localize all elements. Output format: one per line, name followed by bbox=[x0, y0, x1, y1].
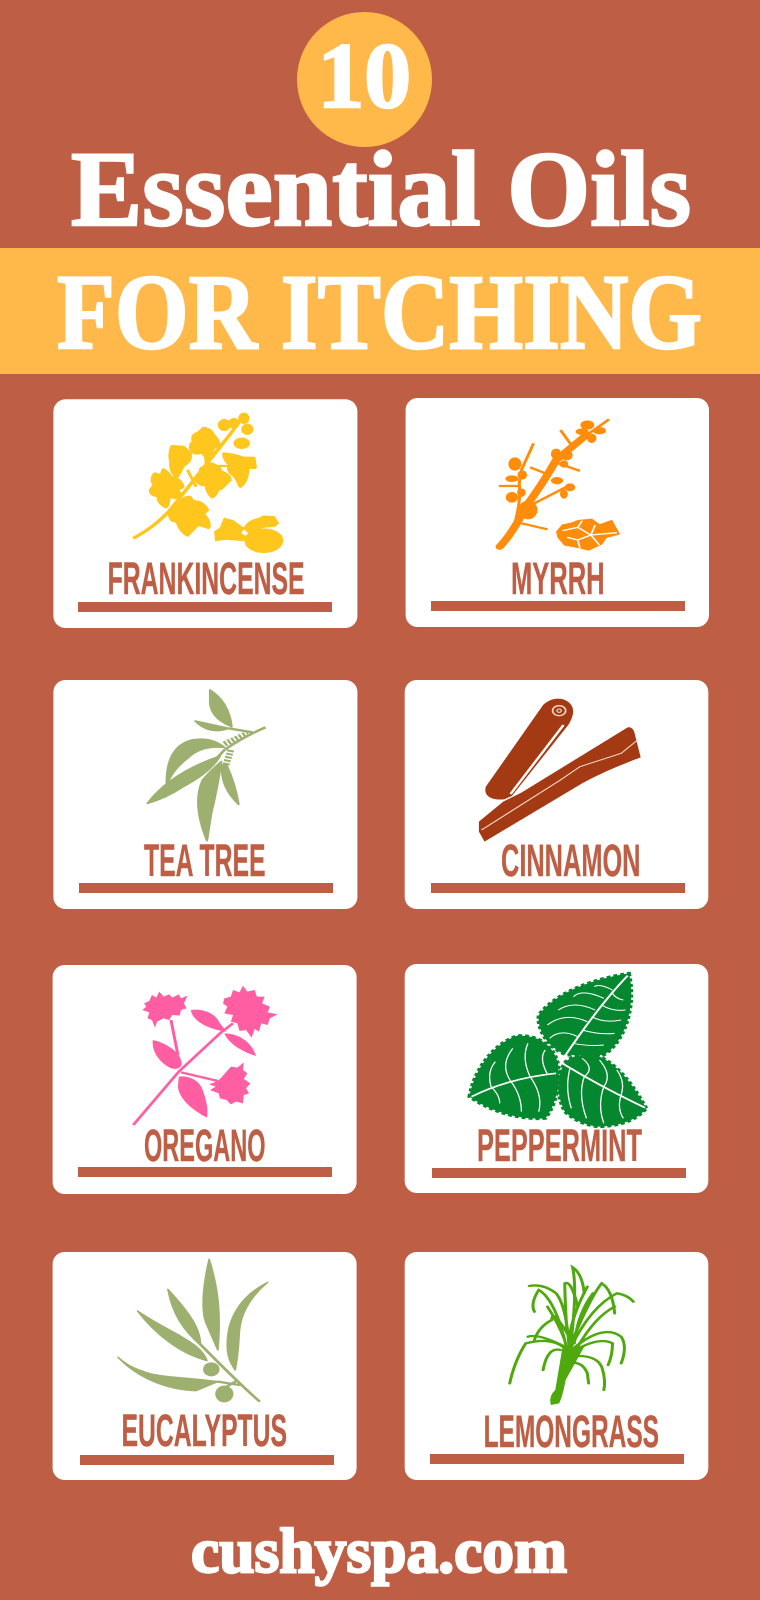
panel: tea tree bbox=[53, 680, 357, 909]
label: myrrh: MYRRH bbox=[511, 553, 605, 604]
icon: oregano bbox=[133, 986, 278, 1125]
underline bar bbox=[78, 1167, 332, 1177]
panel: oregano bbox=[53, 965, 357, 1194]
label: eucalyptus: EUCALYPTUS bbox=[122, 1405, 287, 1456]
badge: number 10: 10 bbox=[318, 25, 411, 128]
underline bar bbox=[431, 601, 685, 611]
icon: lemongrass bbox=[510, 1267, 633, 1405]
underline bar bbox=[78, 602, 332, 612]
title: Essential Oils: Essential Oils bbox=[71, 131, 691, 249]
panel: peppermint bbox=[405, 964, 708, 1193]
panel: cinnamon bbox=[405, 680, 708, 909]
underline bar bbox=[79, 883, 333, 893]
label: tea tree: TEA TREE bbox=[144, 835, 266, 886]
underline bar bbox=[80, 1455, 334, 1465]
label: frankincense: FRANKINCENSE bbox=[108, 553, 305, 604]
icon: eucalyptus bbox=[118, 1259, 268, 1402]
footer: website: cushyspa.com bbox=[191, 1515, 567, 1586]
icon: frankincense bbox=[133, 414, 283, 553]
label: cinnamon: CINNAMON bbox=[501, 835, 640, 886]
underline bar bbox=[431, 883, 685, 893]
label: oregano: OREGANO bbox=[144, 1120, 266, 1171]
badge: number 10 bbox=[297, 12, 432, 147]
icon: peppermint bbox=[469, 973, 646, 1127]
underline bar bbox=[430, 1454, 684, 1464]
panel: frankincense bbox=[53, 399, 357, 628]
panel: myrrh bbox=[406, 398, 709, 627]
icon: tea tree bbox=[148, 690, 266, 841]
panel: eucalyptus bbox=[53, 1252, 357, 1480]
underline bar bbox=[432, 1168, 686, 1178]
icon: cinnamon bbox=[479, 699, 641, 842]
panel: lemongrass bbox=[405, 1252, 708, 1480]
icon: myrrh bbox=[499, 419, 619, 550]
